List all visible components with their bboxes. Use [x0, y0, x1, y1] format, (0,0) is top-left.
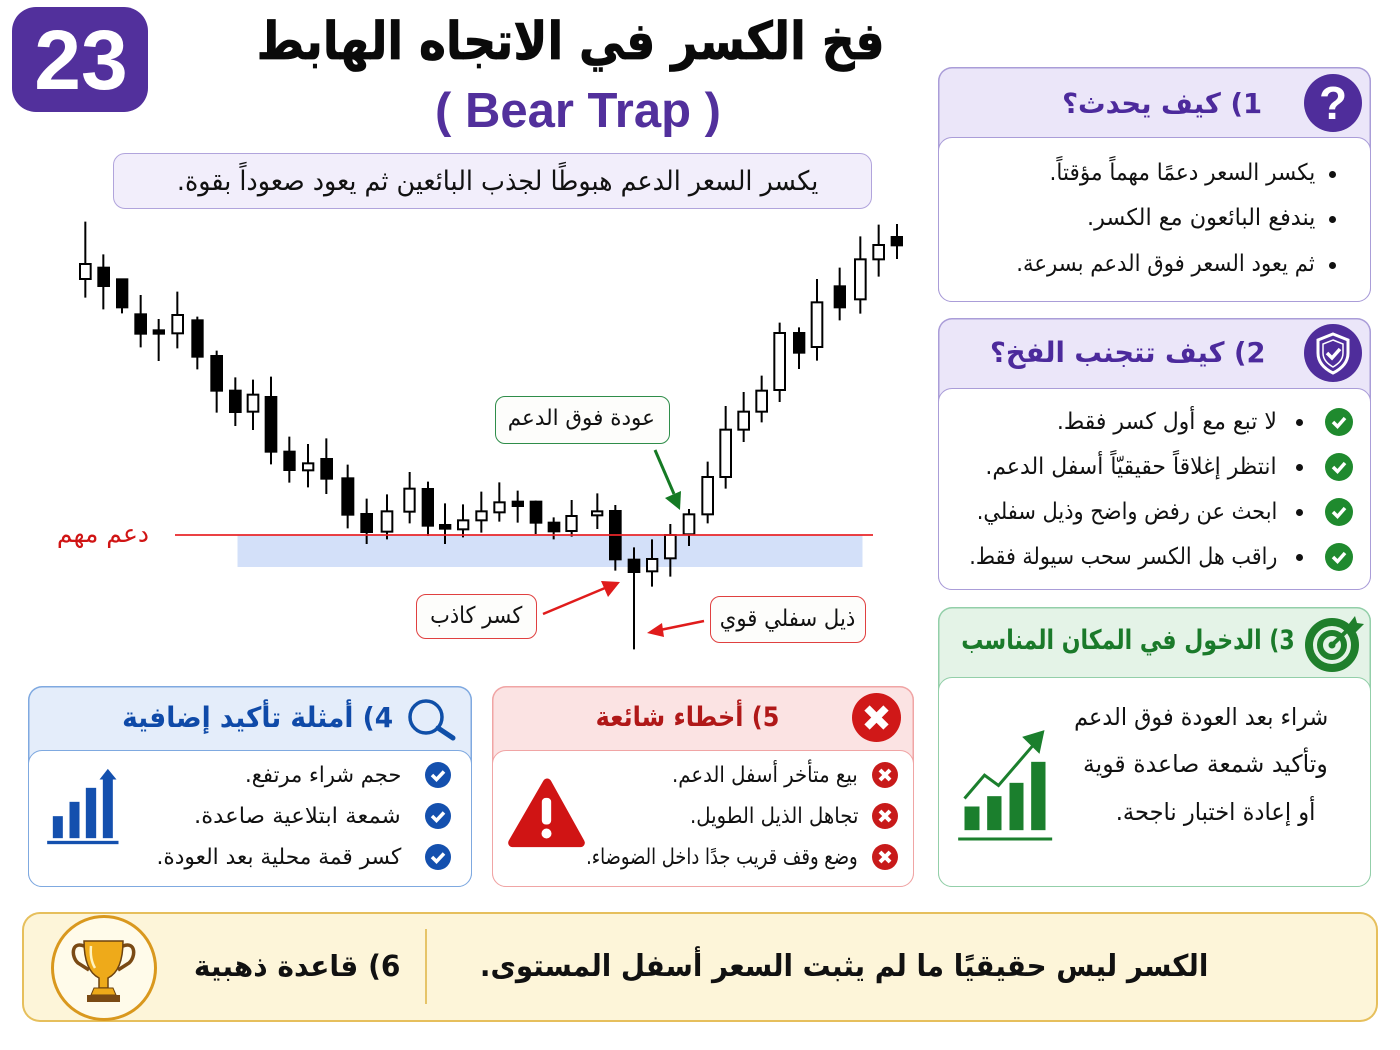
- panel 4: confirmation examples: [28, 686, 472, 887]
- arrow: green to reclaim candle: [654, 449, 681, 510]
- list body 4: شمعة ابتلاعية صاعدة.: [194, 804, 401, 829]
- divider: [425, 929, 426, 1004]
- heading 5: 5) أخطاء شائعة: [595, 702, 779, 733]
- heading 3: 3) الدخول في المكان المناسب: [961, 625, 1295, 656]
- text: entry rule: [1074, 703, 1328, 826]
- list body 5: بيع متأخر أسفل الدعم.: [672, 763, 858, 788]
- banner: definition: [113, 153, 872, 209]
- list body 2: لا تبع مع أول كسر فقط.: [1057, 409, 1277, 435]
- panel 6: golden rule: [22, 912, 1378, 1022]
- arrow: red to lower wick: [647, 620, 704, 637]
- body 3: [938, 677, 1371, 887]
- list body 1: ثم يعود السعر فوق الدعم بسرعة.: [1016, 251, 1315, 277]
- icon: question: ?: [1319, 77, 1347, 129]
- icon: question: [1304, 74, 1362, 132]
- heading 4: 4) أمثلة تأكيد إضافية: [122, 701, 393, 734]
- callout: return above support: [495, 396, 670, 444]
- icon: target: [1305, 616, 1364, 672]
- icon: warning triangle: [508, 778, 585, 848]
- list body 2: انتظر إغلاقاً حقيقيّاً أسفل الدعم.: [986, 454, 1277, 480]
- list body 1: يندفع البائعون مع الكسر.: [1087, 205, 1315, 231]
- list body 2: راقب هل الكسر سحب سيولة فقط.: [969, 544, 1277, 570]
- badge: number 23: 23: [34, 13, 128, 107]
- chart: candlesticks with support zone: [79, 222, 903, 650]
- list body 5: [492, 750, 914, 887]
- panel 5: common mistakes: [492, 686, 914, 887]
- list body 4: حجم شراء مرتفع.: [245, 763, 401, 788]
- heading 1: 1) كيف يحدث؟: [1062, 87, 1262, 120]
- icon: growth chart: [958, 730, 1052, 840]
- callout: false break: كسر كاذب: [430, 603, 522, 629]
- panel 2: how to avoid the trap: [938, 318, 1371, 590]
- heading 2: 2) كيف تتجنب الفخ؟: [990, 336, 1265, 369]
- list body 4: [28, 750, 472, 887]
- icon: shield: [1304, 324, 1362, 382]
- subtitle: ( Bear Trap ): [435, 84, 721, 138]
- callout: strong lower wick: [710, 596, 866, 643]
- callout: false break: [416, 594, 537, 639]
- text: entry rule: أو إعادة اختبار ناجحة.: [1115, 798, 1315, 826]
- icon: red x: [852, 693, 901, 742]
- title: فخ الكسر في الاتجاه الهابط: [257, 12, 885, 72]
- heading 6: 6) قاعدة ذهبية: [193, 949, 400, 983]
- badge: number 23: [12, 7, 148, 112]
- arrow: red to false break: [542, 581, 620, 616]
- icon: rising bars: [47, 768, 118, 844]
- list body 2: [938, 388, 1371, 590]
- list body 2: ابحث عن رفض واضح وذيل سفلي.: [976, 499, 1277, 525]
- list body 1: يكسر السعر دعمًا مهماً مؤقتاً.: [1049, 160, 1315, 186]
- banner: definition: يكسر السعر الدعم هبوطًا لجذب البائعين ثم يعود صعوداً بقوة.: [177, 166, 818, 197]
- list body 4: كسر قمة محلية بعد العودة.: [156, 845, 401, 870]
- panel 3: entry in the right place: [938, 607, 1371, 887]
- text: golden rule: الكسر ليس حقيقيًا ما لم يثبت السعر أسفل المستوى.: [480, 949, 1208, 984]
- icon: magnifier: [408, 699, 456, 740]
- list body 5: وضع وقف قريب جدًا داخل الضوضاء.: [586, 845, 858, 870]
- text: entry rule: وتأكيد شمعة صاعدة قوية: [1083, 750, 1328, 778]
- label: important support: دعم مهم: [57, 519, 149, 548]
- panel 1: how it happens: [938, 67, 1371, 302]
- list body 5: تجاهل الذيل الطويل.: [690, 804, 858, 829]
- list body 1: [938, 137, 1371, 302]
- callout: strong lower wick: ذيل سفلي قوي: [720, 606, 855, 632]
- icon: trophy in circle: [51, 915, 157, 1021]
- text: entry rule: شراء بعد العودة فوق الدعم: [1074, 703, 1328, 731]
- callout: return above support: عودة فوق الدعم: [508, 406, 655, 431]
